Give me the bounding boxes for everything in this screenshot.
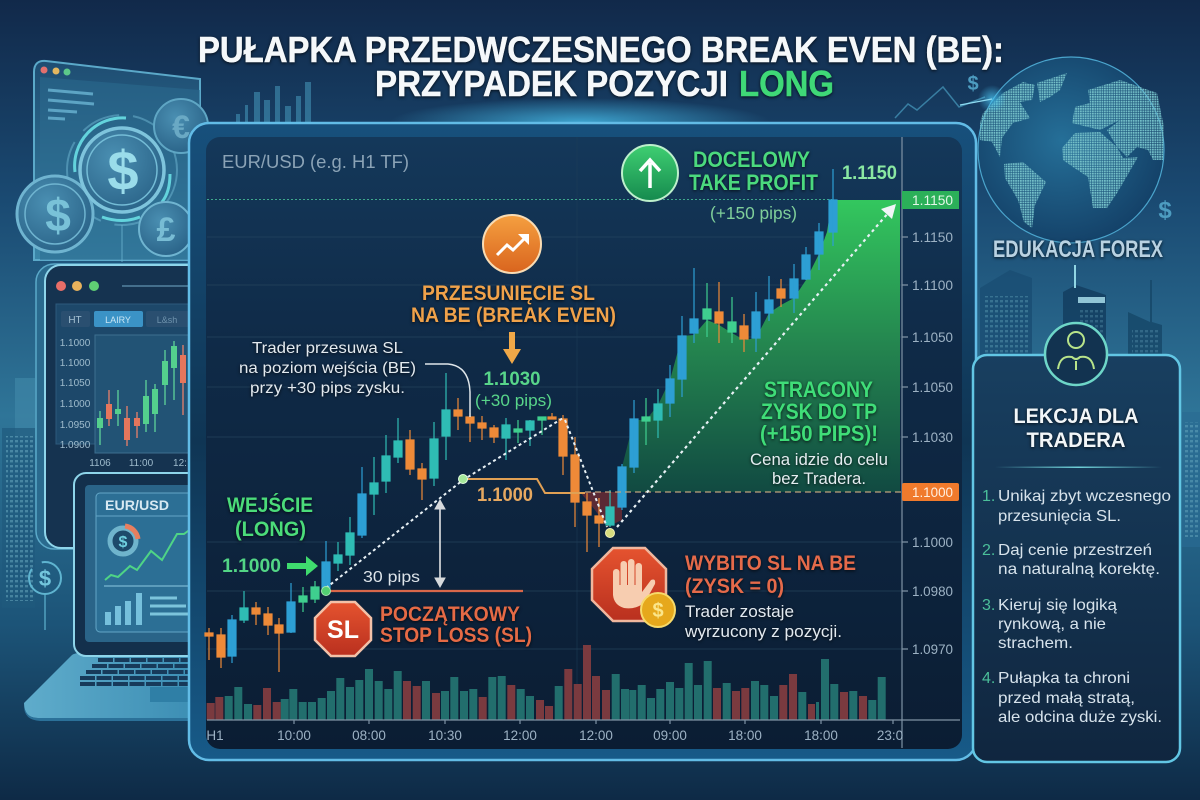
- title: PUŁAPKA PRZEDWCZESNEGO BREAK EVEN (BE):: [198, 29, 1004, 70]
- title: LONG: [739, 63, 834, 104]
- price axis: 1.0980: [912, 584, 953, 599]
- window: candlestick platform: HT: [68, 315, 82, 326]
- time axis: 09:00: [653, 728, 687, 743]
- callout: initial stop loss: [315, 602, 532, 656]
- callout: entry: (LONG): [235, 518, 306, 541]
- icon: dollar coin left: $: [45, 189, 71, 241]
- price axis: 1.1000: [912, 535, 953, 550]
- price axis: [902, 137, 959, 748]
- callout: break even: (+30 pips): [475, 391, 552, 410]
- price axis: 1.1030: [912, 430, 953, 445]
- window: candlestick platform: LAIRY: [105, 315, 131, 325]
- price labels: 1.1000: [60, 358, 91, 369]
- lesson 4: [982, 670, 1162, 726]
- price labels: [60, 338, 187, 469]
- chart background: [206, 137, 962, 749]
- note: trader moves SL: przy +30 pips zysku.: [250, 380, 405, 397]
- price axis: 1.1100: [912, 278, 953, 293]
- tag: 1.1000: 1.1000: [912, 485, 953, 500]
- price labels: 12:: [173, 458, 187, 469]
- top right sparkline: [895, 87, 985, 118]
- title: [198, 29, 1004, 104]
- note: trader moves SL: [239, 340, 470, 417]
- 30 pips measure: 30 pips: [363, 569, 420, 586]
- tag: 1.1000: [902, 483, 959, 501]
- callout: break even: PRZESUNIĘCIE SL: [422, 282, 595, 305]
- icon: pound coin: [139, 202, 193, 256]
- callout: lost profit: (+150 PIPS)!: [760, 421, 878, 446]
- tag: 1.1150: 1.1150: [912, 193, 953, 208]
- title: PRZYPADEK POZYCJI: [375, 63, 728, 104]
- time axis: 18:00: [804, 728, 838, 743]
- icon: dollar pin: [29, 562, 61, 630]
- icon: dollar coin main: $: [107, 139, 139, 202]
- line chart: [105, 528, 192, 580]
- price axis: 1.1050: [912, 330, 953, 345]
- mini candles: [97, 341, 186, 446]
- marker: entry: [322, 586, 330, 596]
- donut: [110, 526, 138, 554]
- panel heading: [1014, 405, 1138, 452]
- price labels: 1106: [89, 458, 111, 469]
- lesson 1: [982, 488, 1171, 525]
- callout: take profit: DOCELOWY: [693, 147, 810, 172]
- chart title: EUR/USD (e.g. H1 TF): [222, 152, 409, 172]
- icon: SL octagon: SL: [327, 616, 359, 644]
- callout: lost profit: ZYSK DO TP: [761, 399, 877, 424]
- time axis: H1: [206, 728, 224, 743]
- icons: faint dollars: [967, 73, 1172, 224]
- window: candlestick platform: L&sh: [157, 315, 177, 325]
- callout: take profit: TAKE PROFIT: [689, 170, 818, 195]
- callout: break even: NA BE (BREAK EVEN): [411, 304, 616, 327]
- icon: orange trend: [483, 215, 541, 273]
- tag: 1.1150: [902, 191, 959, 209]
- icon: gold coin: [641, 593, 675, 627]
- callout: lost profit: [750, 377, 888, 488]
- note: trader moves SL: Trader przesuwa SL: [252, 340, 403, 357]
- dotted path: drop: [565, 420, 607, 527]
- icon: euro coin: €: [172, 109, 190, 145]
- icon: up arrow: [622, 145, 678, 201]
- time axis: 10:30: [428, 728, 462, 743]
- price axis: 1.1050: [912, 380, 953, 395]
- panel heading: TRADERA: [1026, 429, 1126, 452]
- lesson 2: 2.: [982, 542, 995, 559]
- green profit area: [622, 200, 900, 492]
- lesson 3: [982, 597, 1117, 652]
- callout: take profit: [622, 145, 897, 223]
- dotted arrow to take profit: [617, 204, 896, 527]
- icon: pound coin: £: [157, 211, 176, 249]
- callout: entry: WEJŚCIE: [227, 493, 313, 517]
- lesson 3: 3.: [982, 597, 995, 614]
- callout: initial stop loss: STOP LOSS (SL): [380, 623, 532, 647]
- lesson 2: Daj cenie przestrzeń: [998, 542, 1152, 559]
- callout: take profit: (+150 pips): [710, 203, 797, 223]
- donut: $: [119, 534, 128, 551]
- note: trader moves SL: na poziom wejścia (BE): [239, 360, 416, 377]
- price labels: 1.1050: [60, 378, 91, 389]
- lesson 4: ale odcina duże zyski.: [998, 709, 1162, 726]
- callout: lost profit: STRACONY: [764, 377, 873, 402]
- icon: dollar coin main: [80, 128, 164, 212]
- lesson 1: 1.: [982, 488, 995, 505]
- callout: take profit: 1.1150: [842, 163, 897, 184]
- icon: dollar coin left: [17, 176, 93, 252]
- callout: lost profit: Cena idzie do celu: [750, 451, 888, 469]
- callout: stop hit at BE: [592, 548, 856, 641]
- panel: chart frame: [189, 98, 976, 760]
- time axis: 18:00: [728, 728, 762, 743]
- callout: break even: 1.1030: [484, 369, 540, 390]
- price labels: 1.1000: [60, 399, 91, 410]
- lesson 1: Unikaj zbyt wczesnego: [998, 488, 1171, 505]
- lesson 3: strachem.: [998, 635, 1073, 652]
- globe: [960, 57, 1164, 243]
- price labels: 11:00: [129, 458, 154, 469]
- lesson 4: przed małą stratą,: [998, 690, 1135, 707]
- lesson 4: Pułapka ta chroni: [998, 670, 1130, 687]
- callout: entry: [222, 493, 318, 577]
- lesson 4: 4.: [982, 670, 995, 687]
- price labels: 1.1000: [60, 338, 91, 349]
- time axis: 08:00: [352, 728, 386, 743]
- lesson 3: rynkową, a nie: [998, 616, 1106, 633]
- lesson 2: na naturalną korektę.: [998, 561, 1160, 578]
- candlesticks: [205, 169, 837, 672]
- lesson 2: [982, 542, 1160, 578]
- time axis: 12:00: [579, 728, 613, 743]
- time axis: 10:00: [277, 728, 311, 743]
- volume bars: [207, 645, 886, 720]
- price labels: 1.0900: [60, 440, 91, 451]
- 30 pips measure: [363, 500, 445, 587]
- callout: initial stop loss: POCZĄTKOWY: [380, 602, 520, 626]
- price labels: 1.0950: [60, 420, 91, 431]
- break even orange line: [467, 479, 585, 493]
- callout: stop hit at BE: (ZYSK = 0): [685, 575, 784, 598]
- panel heading: LEKCJA DLA: [1014, 405, 1138, 428]
- price axis: 1.1150: [912, 230, 953, 245]
- callout: stop hit at BE: WYBITO SL NA BE: [685, 552, 856, 575]
- callout: stop hit at BE: wyrzucony z pozycji.: [684, 623, 842, 641]
- icons: faint dollars: $: [967, 73, 979, 95]
- callout: break even: [411, 215, 616, 410]
- bars: [105, 593, 142, 625]
- time axis: 23:0: [877, 728, 903, 743]
- time axis: [206, 720, 960, 743]
- grid: [207, 237, 902, 649]
- time axis: 12:00: [503, 728, 537, 743]
- icons: faint dollars: $: [1158, 197, 1172, 224]
- laptop: [24, 473, 204, 721]
- icon: euro coin: [154, 99, 208, 153]
- background city right: [980, 265, 1200, 547]
- take profit level line: [207, 198, 832, 200]
- 1.1000 dashed level: [585, 491, 902, 493]
- panel: lesson for trader: [973, 323, 1180, 762]
- window: coin dashboard: [17, 61, 208, 262]
- icon: dollar pin: $: [39, 566, 51, 591]
- top left mini bars: [236, 82, 311, 122]
- dotted path: rise: [326, 418, 563, 588]
- icon: gold coin: $: [652, 600, 664, 622]
- icon: stop hand: [592, 548, 666, 621]
- callout: lost profit: bez Tradera.: [772, 470, 866, 488]
- label: be level: 1.1000: [477, 485, 533, 506]
- marker: break even: [458, 474, 468, 484]
- price axis: 1.0970: [912, 642, 953, 657]
- marker: stop hit: [606, 528, 614, 538]
- lesson 3: Kieruj się logiką: [998, 597, 1117, 614]
- icon: SL octagon: [315, 602, 371, 656]
- laptop: EUR/USD: [105, 497, 169, 513]
- lesson 1: przesunięcia SL.: [998, 508, 1121, 525]
- callout: entry: 1.1000: [222, 556, 281, 577]
- red trap area: [580, 492, 622, 527]
- icon: trader avatar: [1045, 323, 1107, 385]
- callout: stop hit at BE: Trader zostaje: [685, 603, 794, 621]
- window: candlestick platform: [36, 264, 206, 549]
- stop loss line: [328, 590, 523, 592]
- background city left: [2, 378, 35, 608]
